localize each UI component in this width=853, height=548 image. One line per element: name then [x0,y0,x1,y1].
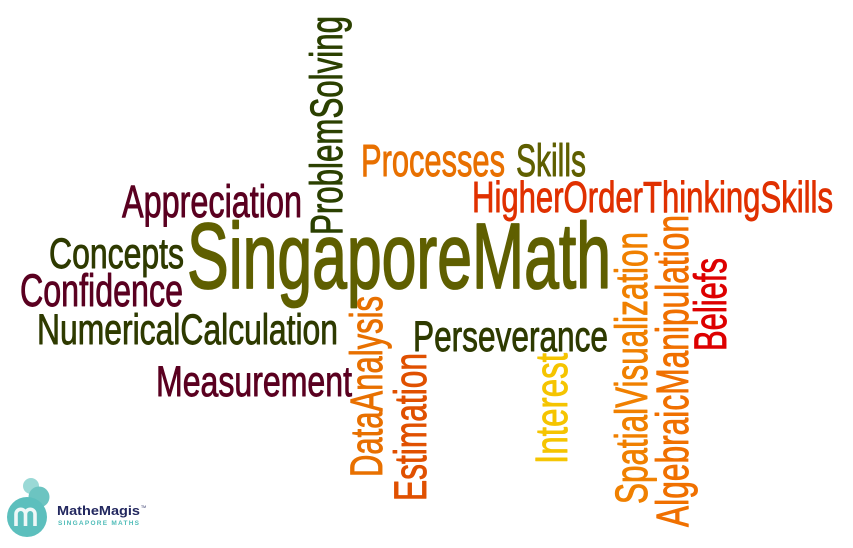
word: Measurement: Measurement [156,358,352,406]
word: Perseverance: Perseverance [413,313,608,361]
word: DataAnalysis: DataAnalysis [341,296,392,477]
word: Processes: Processes [361,135,505,186]
icon: logo bubbles [7,478,50,537]
logo: MatheMagis [7,478,146,537]
word: Interest: Interest [526,353,577,464]
word: SingaporeMath: SingaporeMath [187,204,611,308]
word: AlgebraicManipulation: AlgebraicManipulation [647,215,698,527]
logo tagline: SINGAPORE MATHS [58,520,140,527]
word: Appreciation: Appreciation [122,176,302,227]
word: Beliefs: Beliefs [685,258,736,351]
word: NumericalCalculation: NumericalCalculation [37,306,338,354]
logo trademark: TM [141,505,146,509]
logo wordmark: MatheMagis [57,503,140,518]
word: SpatialVisualization: SpatialVisualization [606,232,657,504]
word: Estimation: Estimation [385,353,436,501]
word: Concepts: Concepts [49,230,184,278]
word: Skills: Skills [516,135,586,186]
word: Confidence: Confidence [20,265,183,316]
